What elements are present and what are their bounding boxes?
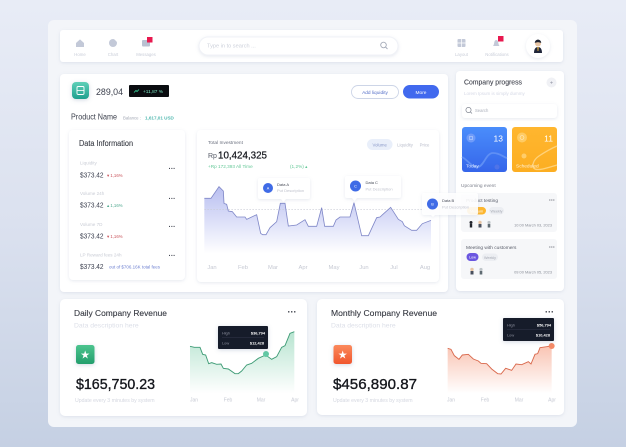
- description: Data description here: [331, 322, 396, 330]
- card: today: Today: [466, 164, 479, 170]
- revenue value: $165,750.23: [76, 377, 155, 393]
- month axis: [190, 398, 299, 404]
- button: add liquidity: Add liquidity: [362, 90, 389, 96]
- event: product testing: Weekly: [490, 209, 503, 213]
- row: volume 7d: ▾ 1,16%: [107, 234, 123, 239]
- add button: +: [550, 80, 553, 86]
- gain line: [208, 164, 308, 169]
- balance value: 289,04: [96, 87, 123, 98]
- card: today: [462, 127, 507, 172]
- nav item: messages: Messages: [136, 52, 156, 57]
- change badge: [129, 85, 169, 97]
- month axis: Jul: [390, 265, 398, 271]
- line chart: [448, 343, 555, 393]
- balance line: 1,617,01 USD: [145, 116, 175, 120]
- button: more: More: [416, 90, 427, 96]
- row: lp reward fees: out of $706.16K total fees: [109, 264, 160, 270]
- callout: data b: Data B: [442, 198, 455, 203]
- search field: [199, 37, 398, 55]
- card: data information: [69, 130, 185, 280]
- event: meeting with customers: Meeting with customers: [466, 245, 517, 251]
- nav item: notifications: Notifications: [485, 52, 509, 57]
- callout: data a: Put Description: [277, 188, 304, 193]
- attendees: [470, 268, 483, 274]
- month axis: Feb: [224, 398, 233, 404]
- tabs: [367, 139, 430, 150]
- icon: teal wallet: [72, 82, 89, 99]
- row: lp reward fees: $373.42: [80, 262, 104, 271]
- card: total investment: [197, 130, 439, 282]
- search box: Search: [475, 108, 489, 113]
- update note: Update every 3 minutes by system: [75, 398, 155, 404]
- callout: data a: Data A: [277, 182, 289, 187]
- row: volume 7d: Volume 7D: [80, 222, 103, 227]
- row: volume 24h: ···: [168, 196, 176, 203]
- product name: Product Name: [71, 112, 117, 122]
- tooltip: [503, 318, 554, 341]
- tooltip: $56,794: [537, 322, 552, 328]
- search box: [462, 104, 557, 118]
- top navigation bar: [60, 30, 563, 62]
- row: liquidity: $373.42: [80, 170, 104, 180]
- panel: monthly company revenue: [317, 299, 564, 415]
- change badge: +11,87 %: [143, 89, 164, 95]
- nav item: chart: Chart: [108, 52, 119, 57]
- description: Data description here: [74, 322, 139, 330]
- row: lp reward fees: ···: [168, 253, 176, 260]
- month axis: Apr: [298, 265, 308, 271]
- heading: Daily Company Revenue: [74, 308, 167, 318]
- callout: data c: [345, 176, 401, 201]
- tooltip: Low: [222, 340, 229, 346]
- row: volume 24h: [80, 191, 176, 210]
- icon: green star: ★: [80, 350, 90, 362]
- add button: [546, 78, 556, 88]
- upcoming label: Upcoming event: [461, 183, 496, 189]
- tooltip: $36,794: [251, 330, 266, 336]
- investment value: Rp: [208, 153, 217, 160]
- tooltip: High: [222, 330, 230, 336]
- icon: orange star: ★: [338, 350, 348, 362]
- gain line: +Rp 172,393 All Time: [208, 164, 253, 169]
- row: volume 24h: Volume 24h: [80, 191, 105, 196]
- month axis: Jan: [447, 398, 455, 404]
- event: product testing: Medium: [470, 209, 483, 213]
- row: volume 7d: ···: [168, 224, 176, 231]
- month axis: Feb: [481, 398, 490, 404]
- event: product testing: [461, 193, 557, 232]
- area chart: [204, 187, 431, 253]
- row: volume 7d: [80, 222, 176, 240]
- tabs: Volume: [373, 142, 387, 147]
- month axis: Jan: [190, 398, 198, 404]
- event: meeting with customers: Weekly: [484, 256, 496, 260]
- callout: data b: B: [431, 202, 434, 206]
- event: product testing: ···: [549, 198, 555, 204]
- row: volume 24h: $373.42: [80, 200, 104, 210]
- tooltip: [218, 326, 268, 349]
- nav item: notifications: [485, 36, 509, 57]
- update note: Update every 3 minutes by system: [333, 398, 413, 404]
- event: meeting with customers: ···: [549, 245, 555, 251]
- icon: green star: [76, 345, 94, 364]
- balance line: Balance :: [123, 116, 141, 120]
- heading: Monthly Company Revenue: [331, 308, 437, 318]
- month axis: Mar: [268, 265, 278, 271]
- search field: Type in to search ...: [207, 44, 256, 50]
- nav item: layout: Layout: [455, 52, 469, 57]
- row: lp reward fees: LP Reward fees 24h: [80, 252, 122, 258]
- tabs: Liquidity: [397, 142, 414, 147]
- month axis: Mar: [515, 398, 524, 404]
- callout: data a: A: [267, 186, 270, 190]
- month axis: Jan: [207, 265, 217, 271]
- month axis: Aug: [420, 265, 430, 271]
- revenue value: $456,890.87: [333, 377, 417, 393]
- row: liquidity: ···: [168, 166, 176, 173]
- row: liquidity: ▾ 1,16%: [107, 173, 123, 178]
- tabs: Price: [420, 142, 430, 147]
- month axis: Apr: [548, 398, 556, 404]
- nav item: messages: [136, 37, 156, 57]
- heading: Data Information: [79, 139, 133, 148]
- tooltip: Low: [507, 332, 514, 338]
- panel: product overview: [60, 74, 448, 292]
- callout: data b: Put Description: [442, 204, 469, 210]
- panel: company progress: [456, 71, 564, 291]
- tooltip: High: [507, 322, 515, 328]
- month axis: [207, 265, 430, 271]
- tooltip: $12,428: [250, 340, 265, 346]
- month axis: Jun: [359, 265, 369, 271]
- line chart: [190, 332, 294, 393]
- button: more: [403, 85, 439, 98]
- event: meeting with customers: Low: [469, 256, 476, 260]
- user avatar: [526, 34, 550, 58]
- event: product testing: 10:00 March 03, 2023: [514, 222, 552, 228]
- month axis: Apr: [291, 398, 299, 404]
- dashboard frame: [48, 20, 577, 427]
- card: today: 13: [494, 134, 503, 144]
- menu dots: ···: [545, 307, 554, 317]
- gain line: (1,2%) ▴: [290, 164, 308, 169]
- event: meeting with customers: 09:00 March 05, 2023: [514, 270, 552, 274]
- month axis: Feb: [238, 265, 248, 271]
- menu dots: ···: [288, 307, 296, 317]
- row: volume 7d: $373.42: [80, 232, 104, 240]
- button: add liquidity: [352, 86, 398, 98]
- tooltip: $10,428: [536, 332, 551, 338]
- investment value: 10,424,325: [218, 150, 267, 162]
- callout: data c: Data C: [366, 180, 378, 185]
- nav item: home: [74, 39, 86, 57]
- nav item: chart: [108, 39, 119, 57]
- callout: data c: C: [354, 184, 357, 188]
- month axis: May: [329, 265, 340, 271]
- row: liquidity: Liquidity: [80, 160, 98, 166]
- card: scheduled: 11: [544, 134, 553, 144]
- card: scheduled: [512, 127, 557, 172]
- nav item: layout: [455, 39, 469, 57]
- event: meeting with customers: [461, 239, 557, 279]
- panel: daily company revenue: [60, 299, 307, 416]
- month axis: [447, 398, 556, 404]
- attendees: [470, 221, 491, 228]
- row: lp reward fees: [80, 252, 176, 271]
- row: volume 24h: ▴ 1,16%: [107, 203, 123, 208]
- icon: orange star: [334, 345, 352, 364]
- balance line: [123, 116, 175, 120]
- callout: data a: [258, 178, 310, 202]
- event: product testing: Product testing: [466, 198, 498, 204]
- month axis: Mar: [257, 398, 266, 404]
- row: liquidity: [80, 160, 176, 180]
- nav item: home: Home: [74, 52, 86, 57]
- label: Total Investment: [208, 140, 244, 146]
- callout: data c: Put Description: [366, 186, 393, 192]
- callout: data b: [422, 193, 478, 217]
- card: scheduled: Scheduled: [516, 164, 539, 170]
- heading: Company progress: [464, 78, 522, 86]
- subtitle: Lorem Ipsum is simply dummy: [464, 91, 526, 96]
